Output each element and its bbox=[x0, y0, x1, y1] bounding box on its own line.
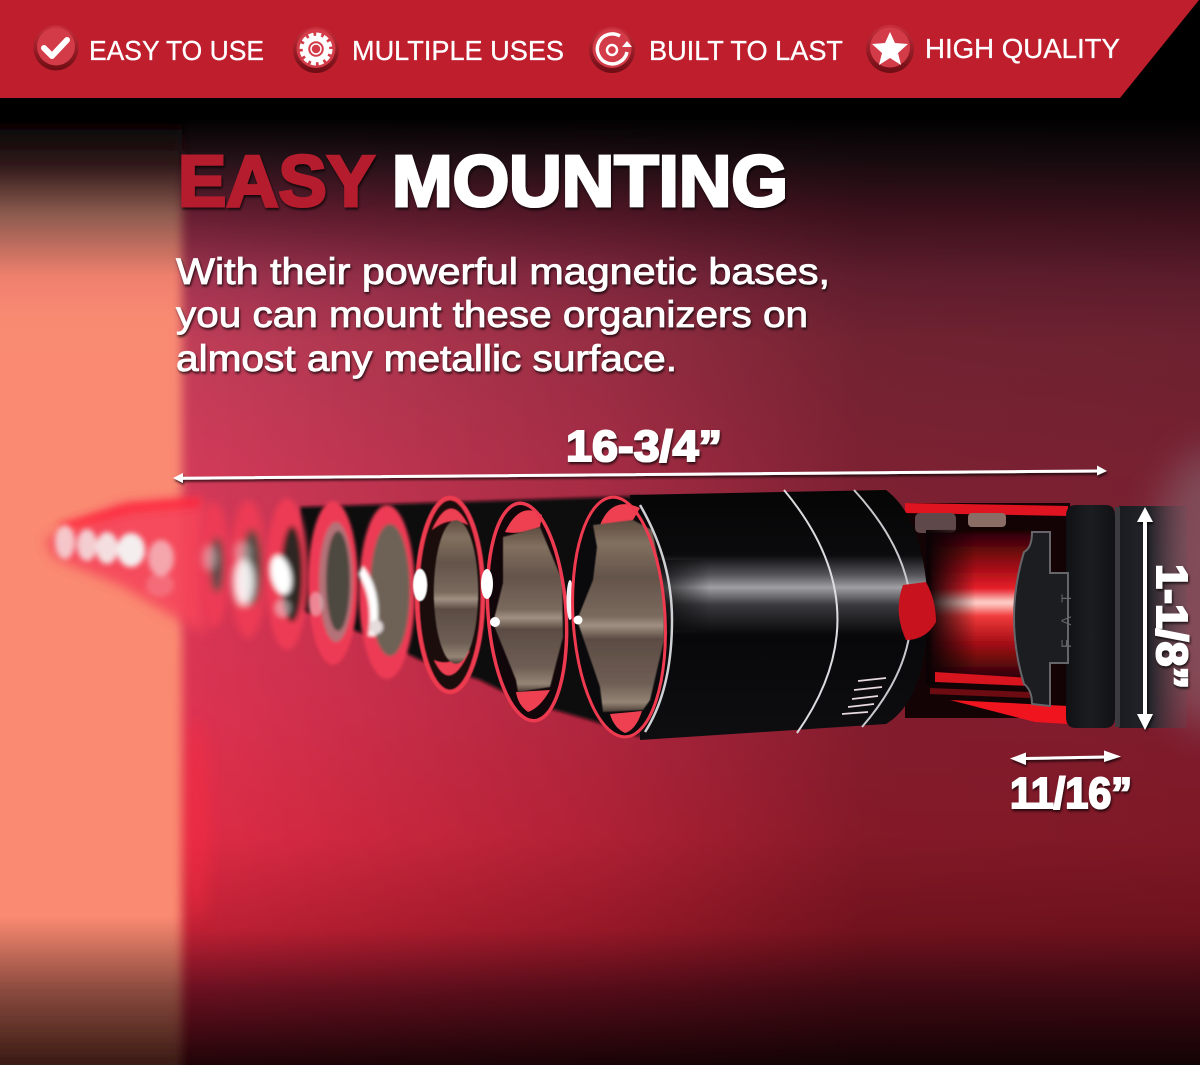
arrow: height bbox=[1137, 507, 1153, 730]
dimension: overall length 16-3/4 inches: 16-3/4” bbox=[566, 422, 722, 471]
socket row with magnetic rail bbox=[45, 490, 1187, 740]
title: Easy Mounting bbox=[178, 142, 788, 222]
icon: gear badge bbox=[293, 27, 339, 73]
socket: medium 2 bbox=[358, 505, 415, 679]
feature: high quality: HIGH QUALITY bbox=[925, 33, 1120, 64]
feature: built to last: BUILT TO LAST bbox=[649, 35, 843, 66]
feature: high quality bbox=[866, 25, 1120, 73]
socket: medium 1 bbox=[308, 501, 358, 665]
black rail behind sockets bbox=[300, 496, 640, 737]
icon: star badge bbox=[866, 25, 914, 73]
socket: large 1 bbox=[480, 501, 574, 723]
front socket opening bbox=[566, 495, 672, 739]
header banner bbox=[0, 0, 1199, 98]
arrow: length bbox=[173, 466, 1107, 483]
body text: you can mount these organizers on bbox=[176, 294, 808, 335]
socket: small 3 bbox=[266, 498, 308, 650]
body text: With their powerful magnetic bases, bbox=[176, 251, 830, 292]
socket: medium 3 bbox=[413, 498, 483, 692]
feature: multiple uses bbox=[293, 27, 564, 73]
dimension: height 1-1/8 inches: 1-1/8” bbox=[1147, 564, 1196, 689]
black magnetic holder bbox=[1014, 505, 1187, 728]
red bracket behind front socket bbox=[905, 503, 1070, 724]
title: Easy Mounting: MOUNTING bbox=[392, 142, 788, 222]
feature: multiple uses: MULTIPLE USES bbox=[352, 35, 564, 66]
socket: small 2 bbox=[230, 500, 266, 638]
feature: easy to use: EASY TO USE bbox=[89, 35, 264, 66]
dimension: width 11/16 inches: 11/16” bbox=[1010, 769, 1132, 818]
dimension: height 1-1/8 inches bbox=[1137, 507, 1196, 730]
embossed FAT text: FAT bbox=[1058, 594, 1074, 648]
feature: easy to use bbox=[34, 26, 264, 70]
feature: built to last bbox=[589, 27, 843, 73]
body text: almost any metallic surface. bbox=[176, 338, 677, 379]
front socket body bbox=[630, 490, 936, 740]
icon: circular arrow gear badge bbox=[589, 27, 635, 73]
body text bbox=[176, 251, 830, 379]
arrow: width bbox=[1010, 750, 1121, 765]
dimension: width 11/16 inches bbox=[1010, 750, 1132, 818]
socket: small 1 bbox=[199, 502, 229, 628]
dimension: overall length 16-3/4 inches bbox=[173, 422, 1107, 483]
icon: check badge bbox=[34, 26, 78, 70]
title: Easy Mounting: EASY bbox=[178, 142, 375, 222]
blurred far sockets cone bbox=[45, 498, 205, 635]
